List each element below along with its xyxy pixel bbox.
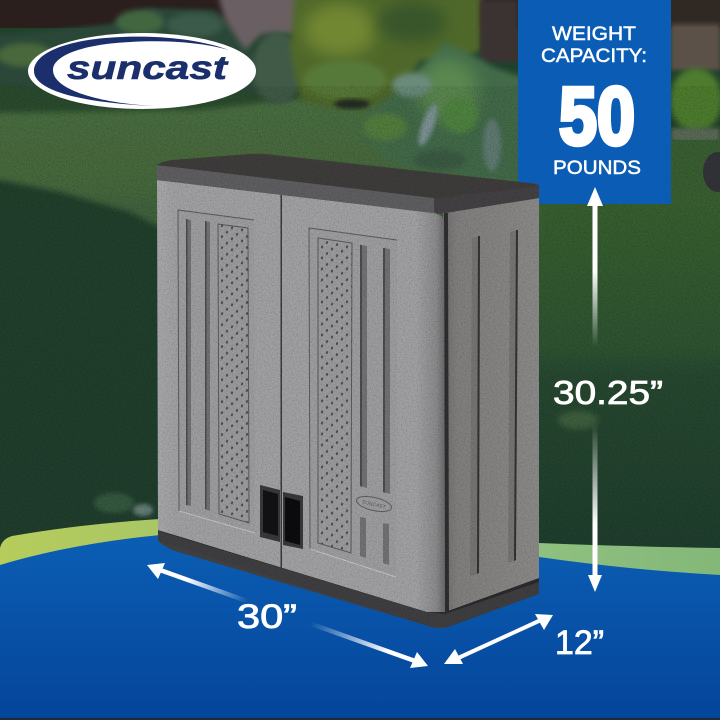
right garden [671, 0, 720, 24]
cabinet top edge [157, 165, 539, 213]
far lawn [0, 84, 270, 124]
cabinet [150, 150, 545, 635]
arrow: depth [444, 614, 553, 664]
label: width: 30” [237, 598, 297, 636]
label: height: 30.25” [553, 374, 663, 411]
heading: weight capacity: WEIGHT [552, 23, 636, 45]
left door dot panel [218, 224, 249, 523]
door split [280, 195, 282, 569]
right door grooves [360, 245, 367, 488]
badge: suncast oval: SUNCAST [361, 499, 386, 511]
handle: left [260, 485, 280, 542]
number: 50: 50 [559, 71, 635, 162]
right door dot panel [318, 238, 352, 553]
heading: weight capacity [541, 23, 647, 67]
grass texture [0, 86, 720, 556]
panel: weight capacity [518, 0, 671, 204]
right door recess [309, 228, 397, 577]
brown fence corner [480, 0, 518, 62]
large leafy plant [358, 42, 525, 182]
cabinet top surface [157, 154, 539, 198]
cabinet side [443, 198, 539, 612]
heading: weight capacity: CAPACITY: [541, 45, 647, 67]
logo wordmark: suncast [67, 49, 230, 86]
side grooves [470, 236, 480, 576]
left door recess [178, 210, 255, 533]
sunlit lawn [0, 98, 540, 240]
handle: right [283, 492, 303, 549]
arrow: height [587, 187, 603, 592]
cabinet front [157, 180, 445, 612]
cabinet surface texture [150, 150, 545, 635]
left door grooves [186, 219, 191, 506]
yellow green tree [290, 0, 482, 108]
label: pounds: POUNDS [553, 157, 641, 179]
logo swoosh [34, 37, 229, 106]
pink shrub [218, 0, 305, 50]
cabinet base [158, 530, 539, 628]
small leaves near cabinet [94, 493, 134, 513]
badge: suncast oval [355, 494, 393, 514]
arrow: width [147, 563, 428, 668]
left hedge [0, 8, 262, 92]
green curved band [0, 519, 720, 580]
label: depth: 12” [555, 624, 604, 662]
logo: suncast [28, 33, 256, 109]
blue floor [0, 535, 720, 718]
